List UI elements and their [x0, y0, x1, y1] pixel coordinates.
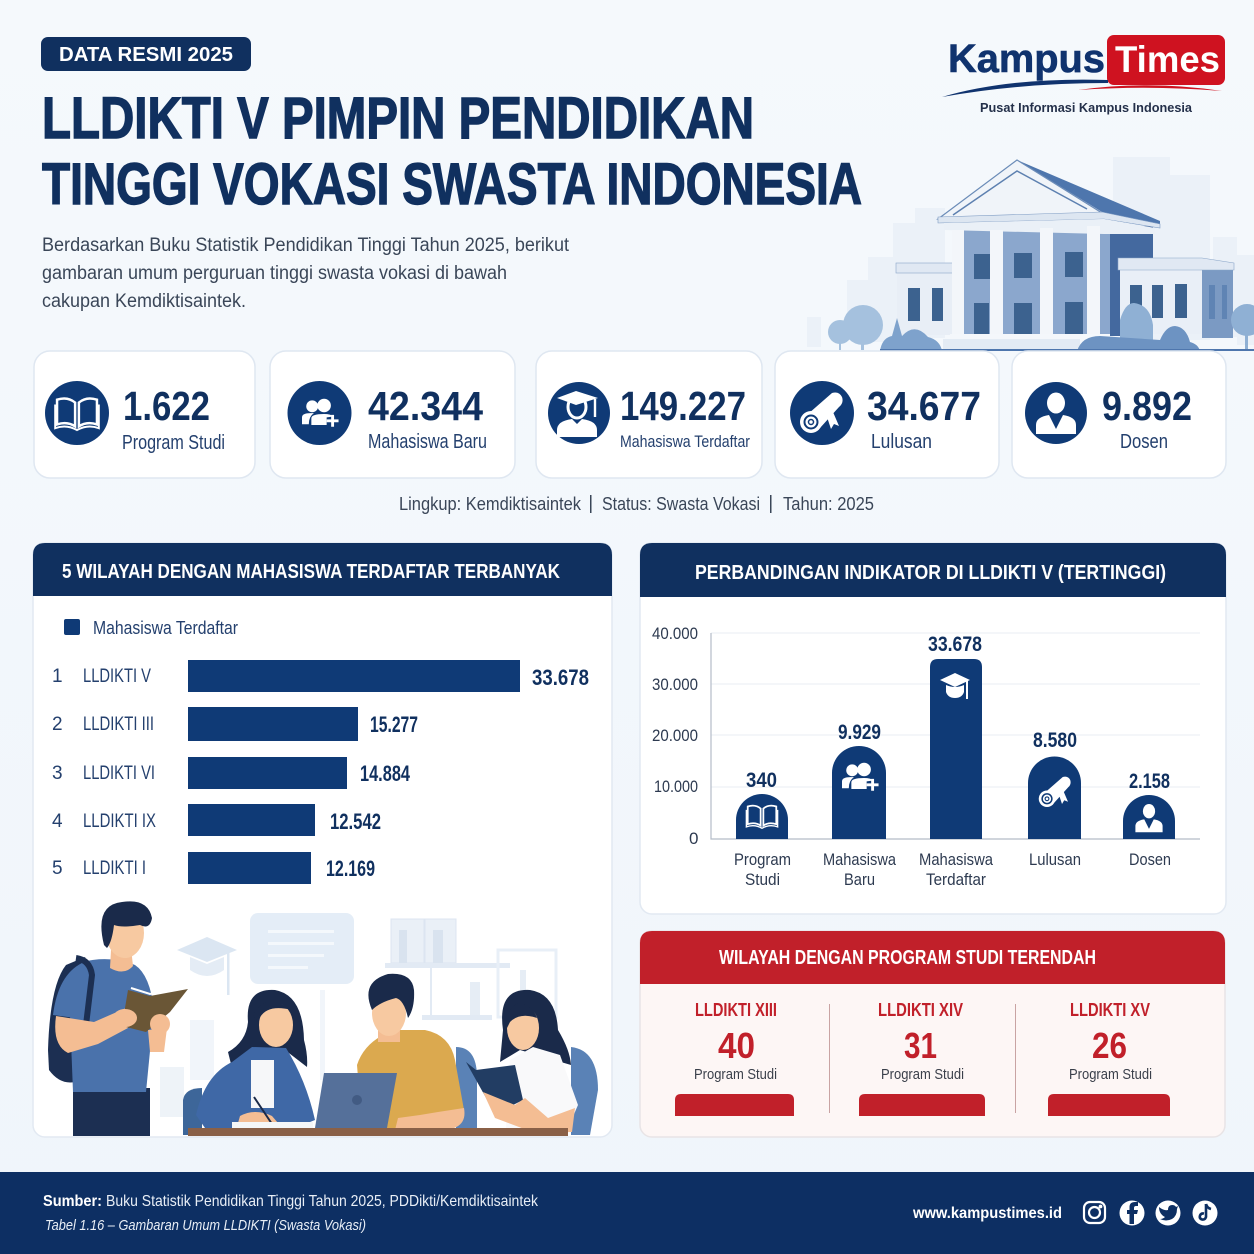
website: www.kampustimes.id: [912, 1205, 1062, 1222]
icon: facebook: [1120, 1200, 1144, 1226]
title: [42, 86, 862, 217]
icon: diploma: [1039, 777, 1071, 807]
panel heading: WILAYAH DENGAN PROGRAM STUDI TERENDAH: [719, 947, 1096, 969]
stat card: mahasiswa terdaftar: Mahasiswa Terdaftar: [620, 432, 750, 451]
column chart: Dosen: [1129, 850, 1171, 869]
icon: book: [45, 381, 109, 445]
region: LLDIKTI XV: Program Studi: [1069, 1066, 1152, 1083]
stat card: dosen: 9.892: [1102, 383, 1192, 429]
source text: Buku Statistik Pendidikan Tinggi Tahun 2025, PDDikti/Kemdiktisaintek: [106, 1193, 539, 1210]
column chart: 20.000: [652, 726, 698, 745]
student: writing: [183, 990, 315, 1135]
stat card: program studi: [34, 351, 255, 478]
column chart: 10.000: [654, 777, 698, 796]
region: LLDIKTI XIV: [859, 1000, 985, 1116]
bar chart: regions: 12.169: [326, 856, 375, 881]
column chart: [652, 624, 1200, 889]
region: LLDIKTI XV: 26: [1092, 1025, 1127, 1066]
bar chart: regions: 5: [52, 858, 63, 879]
scope line: [399, 494, 874, 514]
icon: tiktok: [1192, 1200, 1218, 1226]
region: LLDIKTI XV: [1048, 1000, 1170, 1116]
bar chart: regions: 1: [52, 666, 63, 687]
column chart: 340: [746, 769, 777, 792]
student: standing with book: [48, 901, 188, 1136]
stat card: mahasiswa terdaftar: [536, 351, 762, 478]
stat card: program studi: Program Studi: [122, 432, 225, 454]
footer: [0, 1172, 1254, 1254]
column chart: Mahasiswa: [919, 850, 993, 869]
icon: twitter: [1156, 1200, 1180, 1226]
bar chart: regions: LLDIKTI IX: [83, 811, 156, 832]
panel heading: [33, 543, 612, 596]
source text: [43, 1193, 539, 1234]
source text: Tabel 1.16 – Gambaran Umum LLDIKTI (Swasta Vokasi): [45, 1217, 366, 1234]
column chart: 0: [689, 829, 698, 848]
region: LLDIKTI XV: LLDIKTI XV: [1070, 1000, 1150, 1020]
panel: lowest study programs: [640, 931, 1225, 1137]
stat card: mahasiswa baru: Mahasiswa Baru: [368, 431, 487, 453]
column chart: Terdaftar: [926, 870, 986, 889]
bar chart: regions: LLDIKTI V: [83, 666, 151, 687]
region: LLDIKTI XIV: Program Studi: [881, 1066, 964, 1083]
illustration: campus building: [807, 157, 1254, 351]
panel: top 5 regions: [33, 543, 612, 1137]
region: LLDIKTI XIV: LLDIKTI XIV: [878, 1000, 963, 1020]
stat card: mahasiswa baru: [270, 351, 515, 478]
stat card: lulusan: 34.677: [867, 383, 981, 429]
bar chart: regions: 4: [52, 811, 63, 832]
intro text: Berdasarkan Buku Statistik Pendidikan Tinggi Tahun 2025, berikut: [42, 235, 570, 256]
stat card: lulusan: Lulusan: [871, 431, 932, 453]
column chart: 30.000: [652, 675, 698, 694]
badge: data resmi 2025: [41, 37, 251, 71]
column chart: 8.580: [1033, 729, 1077, 752]
bar chart: regions: [52, 660, 589, 884]
bar chart: regions: 15.277: [370, 712, 418, 737]
panel heading: PERBANDINGAN INDIKATOR DI LLDIKTI V (TERTINGGI): [695, 562, 1166, 584]
source text: Sumber:: [43, 1193, 102, 1210]
stat card: dosen: [1012, 351, 1226, 478]
region: LLDIKTI XIV: 31: [904, 1025, 937, 1066]
panel heading: 5 WILAYAH DENGAN MAHASISWA TERDAFTAR TERBANYAK: [62, 561, 560, 583]
region: LLDIKTI XIII: 40: [718, 1025, 755, 1066]
icon: new students: [288, 381, 352, 445]
bar chart: regions: 3: [52, 763, 63, 784]
stat card: mahasiswa baru: 42.344: [368, 383, 483, 429]
illustration: students studying: [48, 901, 598, 1136]
icon: diploma: [790, 381, 854, 445]
stat card: mahasiswa terdaftar: 149.227: [620, 383, 746, 429]
panel heading: [640, 931, 1225, 984]
column chart: Mahasiswa: [823, 850, 896, 869]
legend: Mahasiswa Terdaftar: [93, 618, 238, 638]
stat card: lulusan: [775, 351, 999, 478]
bar chart: regions: 33.678: [532, 665, 589, 690]
icon: lecturer: [1025, 382, 1087, 444]
logo: KampusTimes: Pusat Informasi Kampus Indonesia: [980, 100, 1193, 115]
scope line: Tahun: 2025: [783, 494, 874, 514]
stat card: program studi: 1.622: [123, 383, 210, 429]
icon: graduation cap: [940, 673, 970, 699]
column chart: Program: [734, 850, 791, 869]
right wing: [1120, 268, 1202, 334]
icon: book: [746, 806, 778, 828]
column chart: 9.929: [838, 721, 881, 744]
icon: new students: [842, 763, 879, 791]
bar chart: regions: 14.884: [360, 761, 411, 786]
intro text: gambaran umum perguruan tinggi swasta vokasi di bawah: [42, 263, 507, 284]
bar chart: regions: LLDIKTI VI: [83, 763, 155, 784]
region: LLDIKTI XIII: [675, 1000, 794, 1116]
bar chart: regions: LLDIKTI I: [83, 858, 146, 879]
intro text: cakupan Kemdiktisaintek.: [42, 291, 246, 312]
table: [188, 1128, 568, 1136]
column chart: 33.678: [928, 633, 982, 656]
student: reading: [466, 990, 598, 1135]
region: LLDIKTI XIII: Program Studi: [694, 1066, 777, 1083]
icon: lecturer: [1135, 804, 1163, 832]
region: LLDIKTI XIII: LLDIKTI XIII: [695, 1000, 777, 1020]
icon: instagram: [1084, 1202, 1105, 1223]
column chart: 40.000: [652, 624, 698, 643]
scope line: Lingkup: Kemdiktisaintek: [399, 494, 582, 514]
column chart: Lulusan: [1029, 850, 1081, 869]
bar chart: regions: 12.542: [330, 809, 381, 834]
icon: graduate: [548, 382, 610, 444]
left wing: [897, 263, 955, 335]
title: LLDIKTI V PIMPIN PENDIDIKAN: [42, 86, 754, 151]
bar chart: regions: 2: [52, 714, 63, 735]
column chart: Baru: [844, 870, 875, 889]
logo: KampusTimes: [942, 35, 1225, 115]
stat card: dosen: Dosen: [1120, 431, 1168, 453]
intro text: [42, 235, 570, 312]
scope line: Status: Swasta Vokasi: [602, 494, 760, 514]
panel: indicator comparison: [640, 543, 1226, 914]
logo: KampusTimes: Times: [1115, 39, 1220, 80]
title: TINGGI VOKASI SWASTA INDONESIA: [42, 152, 862, 217]
badge: data resmi 2025: DATA RESMI 2025: [59, 44, 233, 66]
column chart: 2.158: [1129, 770, 1170, 793]
bar chart: regions: LLDIKTI III: [83, 714, 154, 735]
student: laptop: [315, 974, 477, 1130]
logo: KampusTimes: Kampus: [948, 37, 1105, 81]
column chart: Studi: [745, 870, 780, 889]
panel heading: [640, 543, 1226, 597]
